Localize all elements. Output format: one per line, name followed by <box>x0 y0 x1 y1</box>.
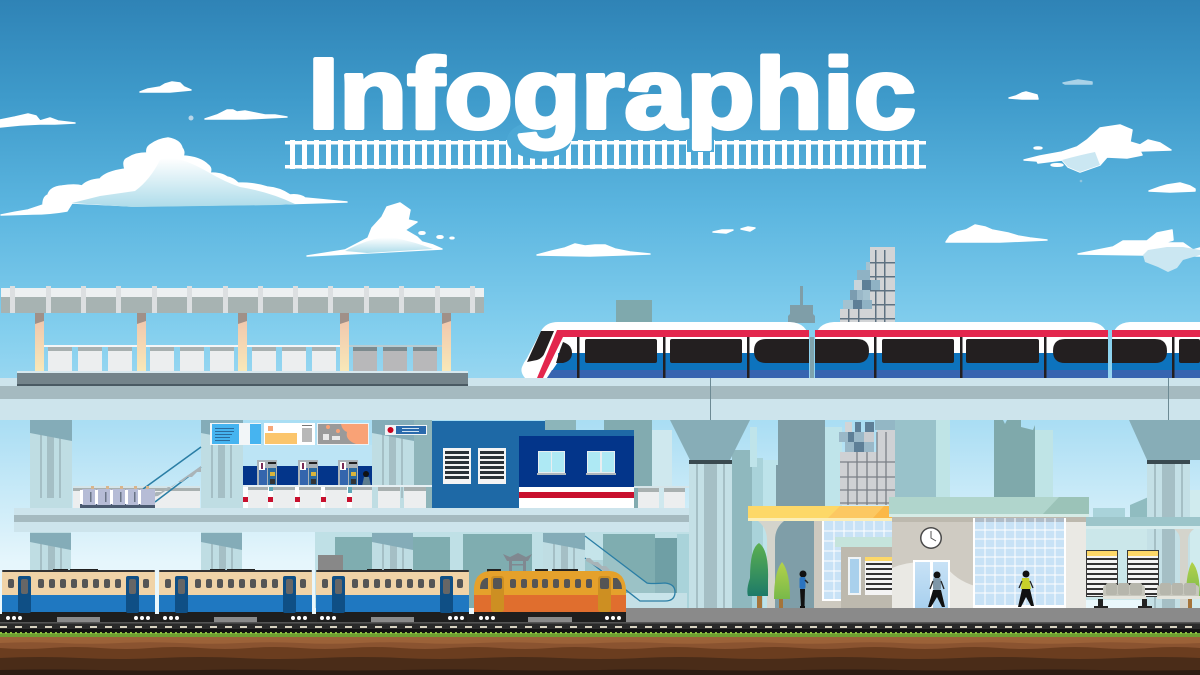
clouds <box>0 80 1200 272</box>
tree small right <box>1186 562 1200 608</box>
fence right of office <box>634 486 690 508</box>
left fence <box>73 486 200 508</box>
pillar right <box>1129 420 1200 608</box>
rail track icon <box>285 121 926 169</box>
passenger car 1 <box>2 569 155 622</box>
platform railing panels <box>40 345 445 371</box>
gate silhouette <box>503 553 532 571</box>
train car 2 <box>815 322 1108 378</box>
cloud centre left <box>307 203 454 256</box>
pixel tower <box>840 247 895 323</box>
title text: Infographic <box>308 38 916 150</box>
descender clearance around letter p <box>687 139 714 152</box>
upper level background city and sky <box>414 420 1200 608</box>
distant skyline above viaduct <box>616 247 895 323</box>
railway track <box>0 622 1200 633</box>
passenger yellow <box>1018 570 1034 607</box>
board: blue notice <box>210 423 261 445</box>
roof <box>889 497 1089 517</box>
right shelter <box>1086 517 1200 608</box>
lower level background <box>315 531 690 608</box>
ticket gates row <box>80 486 155 508</box>
main station building <box>889 497 1089 608</box>
benches <box>1094 583 1200 608</box>
passengers <box>800 570 1034 608</box>
T-shaped viaduct pillars <box>670 420 1200 608</box>
station direction sign <box>385 425 427 435</box>
train coupling <box>810 337 814 378</box>
door <box>913 560 950 608</box>
couplers <box>0 614 475 622</box>
concourse deck slab <box>14 508 690 532</box>
lower pixel tower <box>839 420 895 505</box>
advertising boards <box>210 423 427 445</box>
canopy posts <box>35 313 451 371</box>
diesel train <box>0 569 626 622</box>
passenger grey <box>928 572 945 607</box>
concourse escalator and gates <box>73 447 201 508</box>
escalator <box>143 447 201 502</box>
glazing <box>822 521 892 601</box>
timetable boards <box>1086 550 1159 597</box>
annex <box>835 537 892 608</box>
passenger blue <box>800 570 808 608</box>
yellow canopy <box>748 506 892 608</box>
pillar centre <box>670 420 750 608</box>
train car 3 <box>1112 322 1200 378</box>
office windows <box>537 451 616 475</box>
station office blue blocks <box>432 421 690 508</box>
board: grey and orange poster <box>317 423 369 445</box>
trees <box>747 543 790 608</box>
clock <box>920 527 942 549</box>
cloud large right <box>1024 125 1171 182</box>
lower level columns stubs <box>30 531 585 570</box>
ticket machines <box>257 460 358 486</box>
passenger car 2 <box>159 569 312 622</box>
elevated station canopy and platform <box>1 286 484 371</box>
tree light green <box>774 562 790 608</box>
passenger silhouette <box>362 471 371 486</box>
descender clearance around letter g <box>507 121 571 159</box>
canopy roof <box>1 286 484 313</box>
ground platform <box>625 608 1200 622</box>
large glazed wall <box>973 518 1066 608</box>
soil layers <box>0 637 1200 675</box>
board: orange notice <box>264 423 315 445</box>
tree dark green <box>747 543 768 608</box>
cloud far right <box>1078 230 1200 272</box>
station building left wing <box>814 521 892 608</box>
platform slab <box>17 371 468 386</box>
fare gates <box>243 487 372 508</box>
louvres <box>443 448 506 484</box>
ticket hall <box>243 445 432 508</box>
train car 1 <box>521 322 809 378</box>
title with rail track <box>285 38 926 169</box>
concourse level columns <box>30 420 414 508</box>
cloud large left <box>1 138 347 215</box>
elevated viaduct deck <box>0 378 1200 420</box>
passenger car 3 <box>316 569 469 622</box>
right fence <box>372 485 432 508</box>
ground escalator <box>585 536 675 601</box>
grass strip <box>0 633 1200 637</box>
locomotive <box>474 569 626 622</box>
elevated sky train <box>521 322 1200 378</box>
